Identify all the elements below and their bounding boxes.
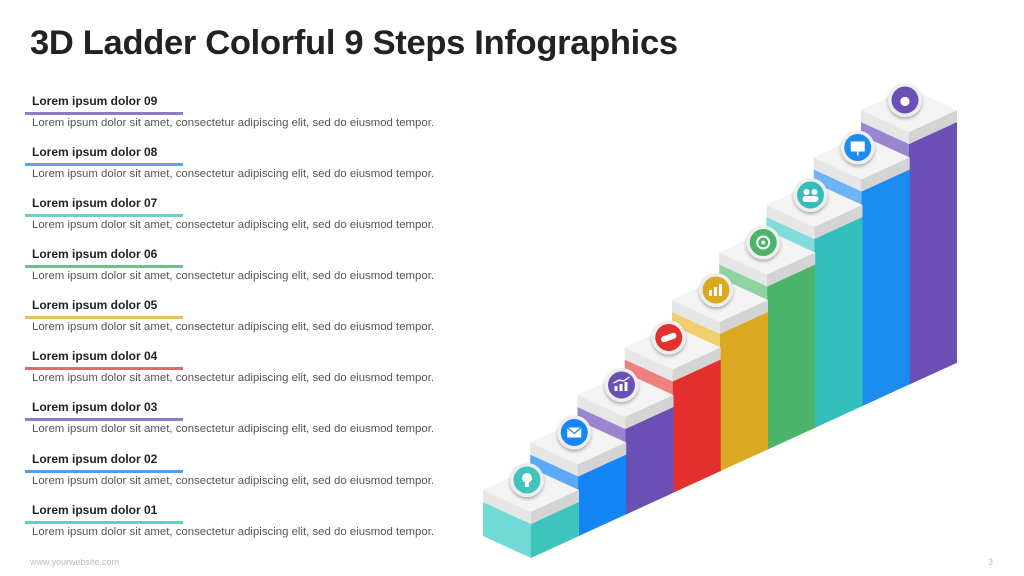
text item 07 — [25, 196, 434, 231]
step 3 — [578, 368, 674, 515]
text item 05 — [25, 298, 434, 333]
step 6 — [719, 226, 815, 450]
text item 04 — [25, 349, 434, 384]
icon: idea head — [888, 83, 922, 117]
text item 01: Lorem ipsum dolor sit amet, consectetur adipiscing elit, sed do eiusmod tempor. — [32, 526, 434, 538]
text item 01 — [25, 503, 434, 538]
step 1 — [483, 463, 579, 558]
text item 08 — [25, 145, 434, 180]
text item 04: Lorem ipsum dolor 04 — [32, 349, 157, 363]
icon: handshake — [652, 320, 686, 354]
step 2 — [530, 416, 626, 536]
text item 08: Lorem ipsum dolor sit amet, consectetur adipiscing elit, sed do eiusmod tempor. — [32, 168, 434, 180]
text item 09 — [25, 94, 434, 129]
text item 03 — [25, 400, 434, 435]
text item 04: Lorem ipsum dolor sit amet, consectetur adipiscing elit, sed do eiusmod tempor. — [32, 372, 434, 384]
icon: light bulb — [510, 463, 544, 497]
icon: mail — [557, 416, 591, 450]
step 5 — [672, 273, 768, 471]
text item 03: Lorem ipsum dolor 03 — [32, 400, 157, 414]
text item 02: Lorem ipsum dolor sit amet, consectetur adipiscing elit, sed do eiusmod tempor. — [32, 475, 434, 487]
icon: growth chart — [604, 368, 638, 402]
step 4 — [625, 320, 721, 493]
text item 02 — [25, 452, 434, 487]
icon: presentation — [841, 130, 875, 164]
text item 07: Lorem ipsum dolor 07 — [32, 196, 157, 210]
text item 06: Lorem ipsum dolor 06 — [32, 247, 157, 261]
icon: team — [794, 178, 828, 212]
title: 3D Ladder Colorful 9 Steps Infographics — [30, 24, 678, 62]
text item 09: Lorem ipsum dolor 09 — [32, 94, 157, 108]
step 8 — [814, 130, 910, 406]
text item 08: Lorem ipsum dolor 08 — [32, 145, 157, 159]
text item 07: Lorem ipsum dolor sit amet, consectetur adipiscing elit, sed do eiusmod tempor. — [32, 219, 434, 231]
icon: idea head: ● — [900, 94, 910, 108]
footer website: www.yourwebsite.com — [30, 557, 119, 567]
icon: target — [746, 226, 780, 260]
text item 05: Lorem ipsum dolor sit amet, consectetur adipiscing elit, sed do eiusmod tempor. — [32, 321, 434, 333]
text item 02: Lorem ipsum dolor 02 — [32, 452, 157, 466]
text item 06 — [25, 247, 434, 282]
icon: bar chart — [699, 273, 733, 307]
step 9 — [861, 83, 957, 385]
text item 03: Lorem ipsum dolor sit amet, consectetur adipiscing elit, sed do eiusmod tempor. — [32, 423, 434, 435]
text item 01: Lorem ipsum dolor 01 — [32, 503, 157, 517]
text item 09: Lorem ipsum dolor sit amet, consectetur adipiscing elit, sed do eiusmod tempor. — [32, 117, 434, 129]
step 7 — [766, 178, 862, 428]
text item 06: Lorem ipsum dolor sit amet, consectetur adipiscing elit, sed do eiusmod tempor. — [32, 270, 434, 282]
page number: 3 — [988, 557, 993, 567]
text item 05: Lorem ipsum dolor 05 — [32, 298, 157, 312]
